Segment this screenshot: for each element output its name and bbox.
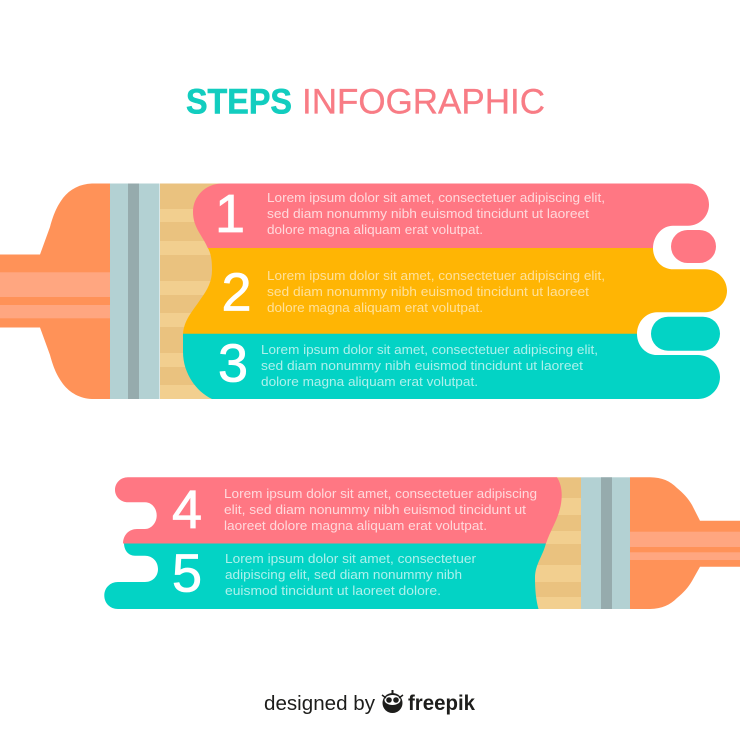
brush handle — [0, 184, 110, 399]
number 4: 4 — [172, 480, 202, 540]
step 3 band — [183, 317, 720, 399]
step 2 text — [267, 268, 605, 315]
step 3 text: Lorem ipsum dolor sit amet, consectetuer adipiscing elit, — [261, 342, 598, 357]
step 4 text — [224, 486, 537, 533]
step 4 text: Lorem ipsum dolor sit amet, consectetuer adipiscing — [224, 486, 537, 501]
metal ferrule — [110, 184, 160, 399]
step 3 text: sed diam nonummy nibh euismod tincidunt ut laoreet — [261, 358, 583, 373]
number 1: 1 — [215, 184, 245, 244]
step 3 text — [261, 342, 598, 389]
step 4 band — [115, 477, 562, 544]
step 4 text: laoreet dolore magna aliquam erat volutpat. — [224, 518, 487, 533]
step 2 band — [183, 248, 727, 334]
step 2 text: dolore magna aliquam erat volutpat. — [267, 300, 483, 315]
freepik credit: designed by — [264, 693, 375, 715]
number 2: 2 — [221, 262, 252, 322]
step 1 text: dolore magna aliquam erat volutpat. — [267, 222, 483, 237]
brush handle — [630, 477, 740, 609]
upper paintbrush — [0, 184, 727, 399]
step 5 text: euismod tincidunt ut laoreet dolore. — [225, 583, 441, 598]
step 1 text: Lorem ipsum dolor sit amet, consectetuer adipiscing elit, — [267, 190, 605, 205]
freepik credit: freepik — [408, 692, 475, 715]
step 5 band — [104, 543, 546, 609]
icon: freepik mascot — [382, 690, 403, 713]
lower paintbrush — [104, 477, 740, 609]
bristles — [530, 477, 581, 609]
step 1 band — [193, 184, 716, 263]
title: INFOGRAPHIC — [302, 82, 545, 122]
title — [186, 82, 545, 122]
step 2 text: Lorem ipsum dolor sit amet, consectetuer adipiscing elit, — [267, 268, 605, 283]
step 5 text: adipiscing elit, sed diam nonummy nibh — [225, 567, 462, 582]
step 3 text: dolore magna aliquam erat volutpat. — [261, 374, 478, 389]
step 5 text — [225, 551, 477, 598]
step 5 text: Lorem ipsum dolor sit amet, consectetuer — [225, 551, 477, 566]
number 3: 3 — [218, 334, 248, 394]
metal ferrule — [581, 477, 630, 609]
step 1 text — [267, 190, 605, 237]
number 5: 5 — [172, 544, 202, 604]
freepik credit — [264, 690, 475, 715]
bristles — [160, 184, 225, 399]
step 2 text: sed diam nonummy nibh euismod tincidunt ut laoreet — [267, 284, 589, 299]
step 4 text: elit, sed diam nonummy nibh euismod tincidunt ut — [224, 502, 526, 517]
title: STEPS — [186, 82, 292, 122]
step 1 text: sed diam nonummy nibh euismod tincidunt ut laoreet — [267, 206, 589, 221]
